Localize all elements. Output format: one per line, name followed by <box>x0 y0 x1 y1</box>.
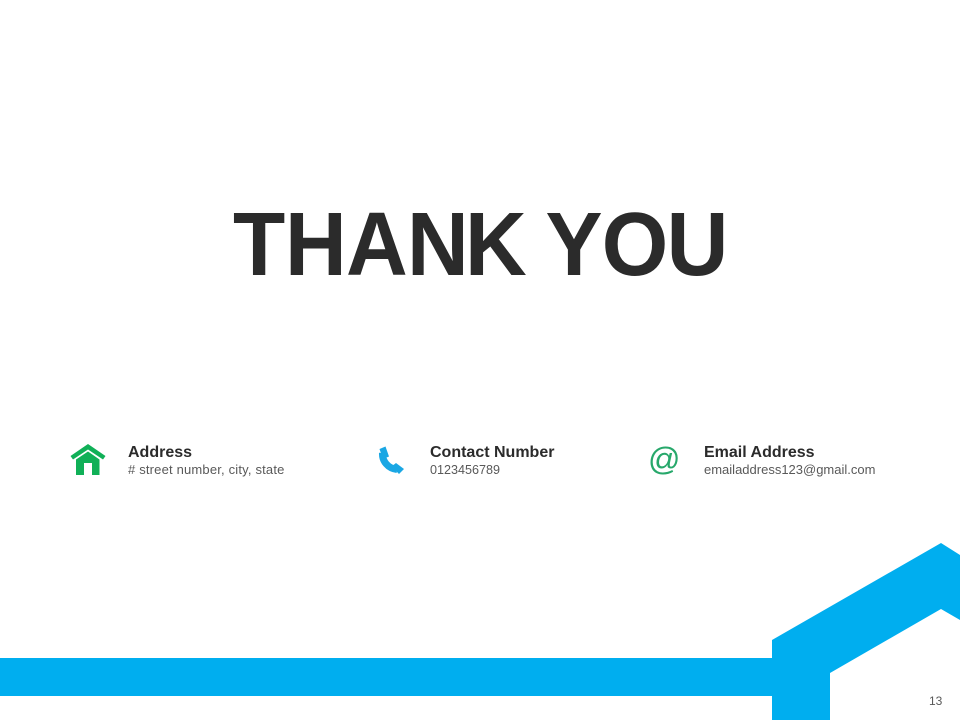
icon: phone <box>378 446 404 474</box>
icon: at sign: @ <box>648 441 680 477</box>
phone heading: Contact Number <box>430 444 554 460</box>
icon: house <box>70 444 106 475</box>
contact: address <box>70 444 285 476</box>
email heading: Email Address <box>704 444 815 460</box>
phone detail: 0123456789 <box>430 462 500 476</box>
address detail: # street number, city, state <box>128 462 285 476</box>
address heading: Address <box>128 444 192 460</box>
email detail: emailaddress123@gmail.com <box>704 462 875 476</box>
contact: phone <box>378 444 554 476</box>
contact: email <box>648 441 875 477</box>
page number: 13 <box>929 694 942 708</box>
